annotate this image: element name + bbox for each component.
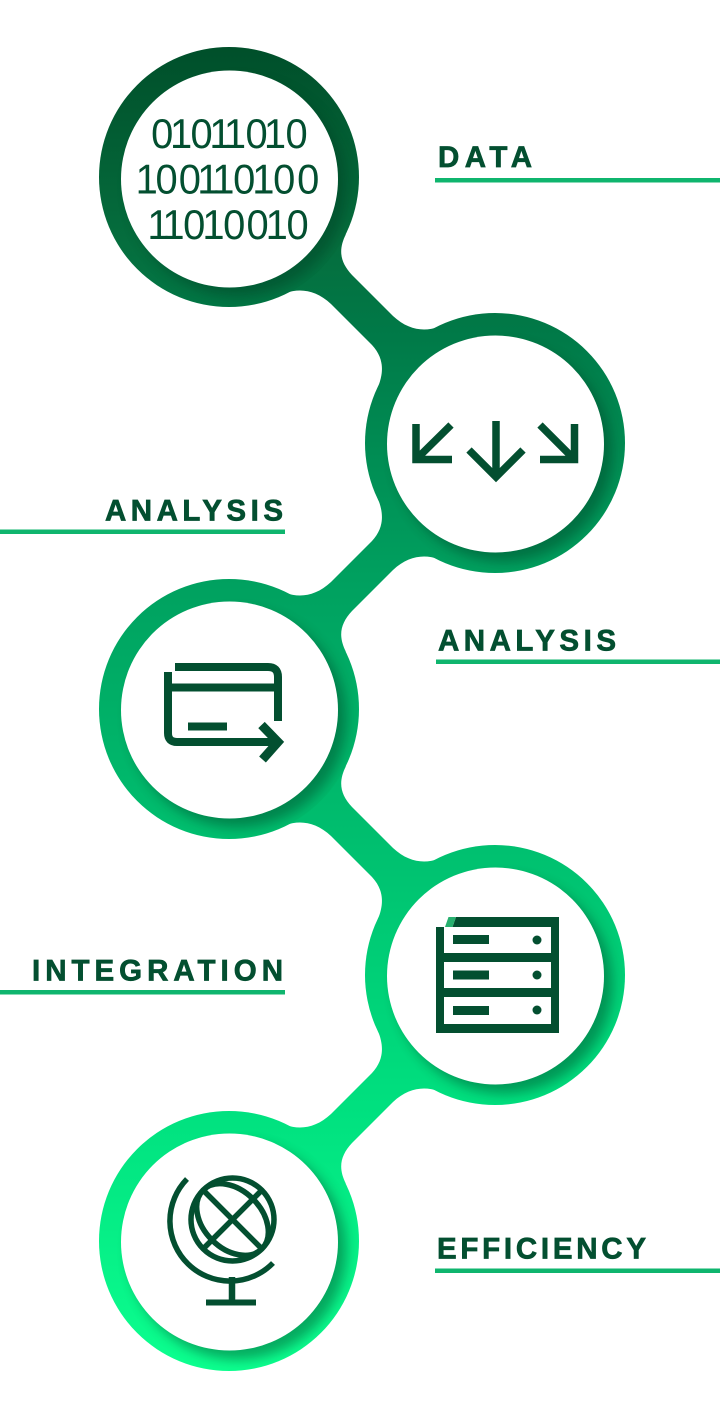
icon: card with arrow: [168, 667, 278, 760]
inner shadows on rings: [130, 80, 612, 1360]
icon: binary digits: 01011010: [151, 110, 308, 157]
gradient chain of rings and connectors: [99, 47, 625, 1371]
node: efficiency globe: [121, 1134, 338, 1350]
icon: binary digits: 11010010: [147, 201, 309, 248]
label: analysis right: [436, 624, 720, 664]
icon: three down arrows: [416, 421, 574, 478]
label: efficiency: EFFICIENCY: [437, 1232, 646, 1266]
node: analysis card: [121, 602, 338, 818]
node: integration server: [387, 868, 604, 1084]
icon: server rack: [436, 917, 559, 1033]
icon: binary digits: 100110100: [136, 156, 319, 203]
icon: binary digits: [136, 110, 319, 248]
label: analysis right: ANALYSIS: [438, 624, 616, 658]
label: analysis left: ANALYSIS: [105, 494, 283, 528]
node: data: [121, 70, 338, 288]
label: analysis left: [0, 494, 285, 534]
label: integration: INTEGRATION: [32, 954, 283, 988]
label: efficiency: [435, 1232, 720, 1273]
label: data: DATA: [438, 141, 532, 174]
icon: globe on stand: [170, 1170, 282, 1302]
label: data: [435, 141, 720, 182]
node: analysis arrows: [387, 336, 604, 552]
